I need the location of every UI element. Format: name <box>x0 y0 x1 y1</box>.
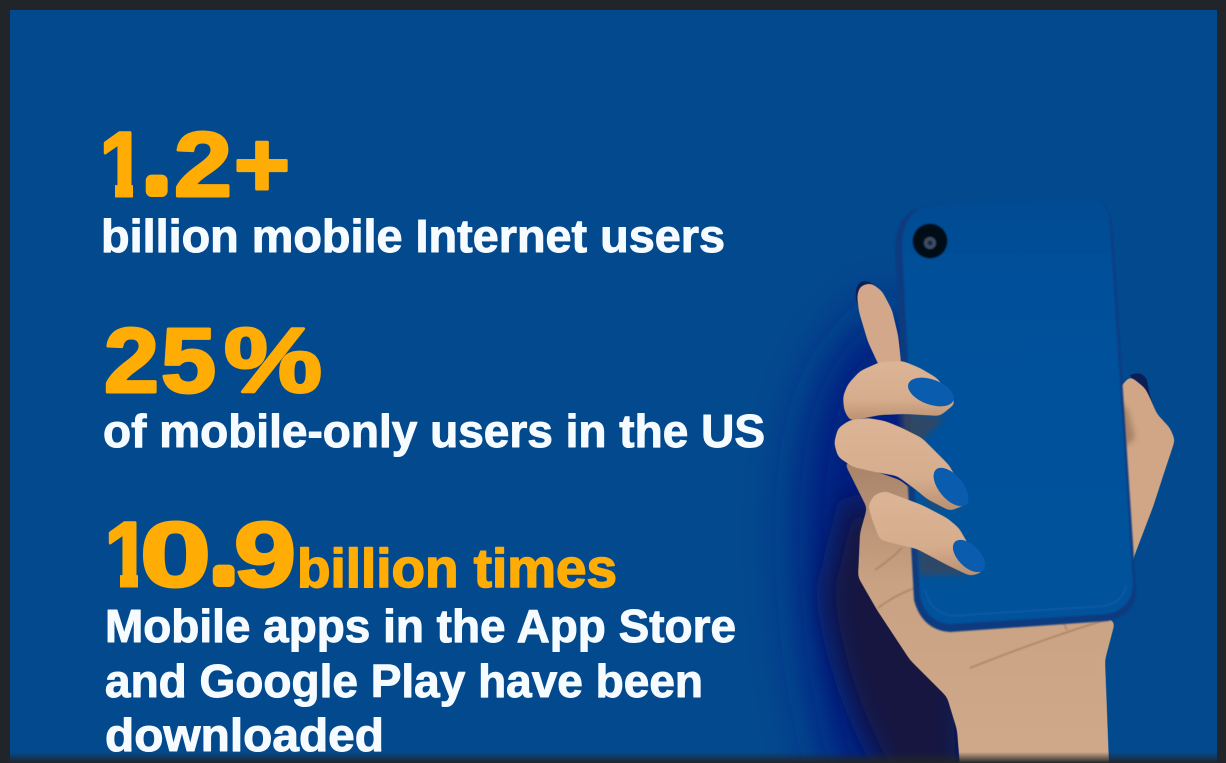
blue glow behind hand <box>800 300 980 763</box>
palm creases <box>875 548 1105 668</box>
bottom fade <box>0 752 1226 763</box>
dark nail of thumb <box>1130 373 1157 414</box>
stat 1 number: 2 <box>174 114 232 216</box>
stat 1 label: billion mobile Internet users <box>101 210 725 262</box>
hand back and palm <box>843 460 1115 763</box>
ring finger <box>868 491 984 576</box>
stat 3 number: 9 <box>234 504 296 606</box>
stat 2 number: 5 <box>161 310 216 412</box>
index finger <box>843 361 956 421</box>
stat 2 label: of mobile-only users in the US <box>103 405 765 457</box>
stat 1 number: + <box>234 114 290 216</box>
ring nail <box>947 534 991 578</box>
stat 2 number: % <box>224 310 322 412</box>
phone body <box>902 198 1133 624</box>
phone inner bevel <box>925 585 1126 616</box>
stat 3 number <box>108 520 294 588</box>
thumb <box>1116 376 1175 600</box>
dark nail of top finger <box>856 281 880 315</box>
phone shadow edge <box>895 198 1136 632</box>
stat 3 description: Mobile apps in the App Store <box>105 600 736 652</box>
stat 3 number: 0 <box>140 504 211 606</box>
stat 3 number: . <box>214 518 233 596</box>
middle nail <box>927 462 975 512</box>
dark shadow behind hand <box>825 490 965 763</box>
stat 3 description: and Google Play have been <box>105 655 703 707</box>
stat 1 number: 1 <box>100 114 146 216</box>
top finger <box>857 283 902 368</box>
hand and phone illustration <box>834 198 1175 763</box>
middle finger <box>834 418 970 511</box>
stat 3 <box>106 520 735 752</box>
camera <box>912 224 948 258</box>
stat 1 number: . <box>147 128 166 206</box>
index nail <box>904 372 958 412</box>
stat 3 description: downloaded <box>105 709 384 761</box>
stat 2 <box>103 310 765 457</box>
stat 2 number <box>104 310 322 412</box>
shadows cast by fingers on phone <box>900 410 968 575</box>
stat 1 <box>104 130 724 253</box>
thumb inner shade <box>1118 400 1135 450</box>
stat 3 number: 1 <box>104 504 150 606</box>
stat 3 description <box>105 600 736 761</box>
stat 1 number <box>104 130 288 198</box>
stat 2 number: 2 <box>104 310 159 412</box>
phone <box>895 198 1136 632</box>
stat 3 unit: billion times <box>297 537 617 599</box>
